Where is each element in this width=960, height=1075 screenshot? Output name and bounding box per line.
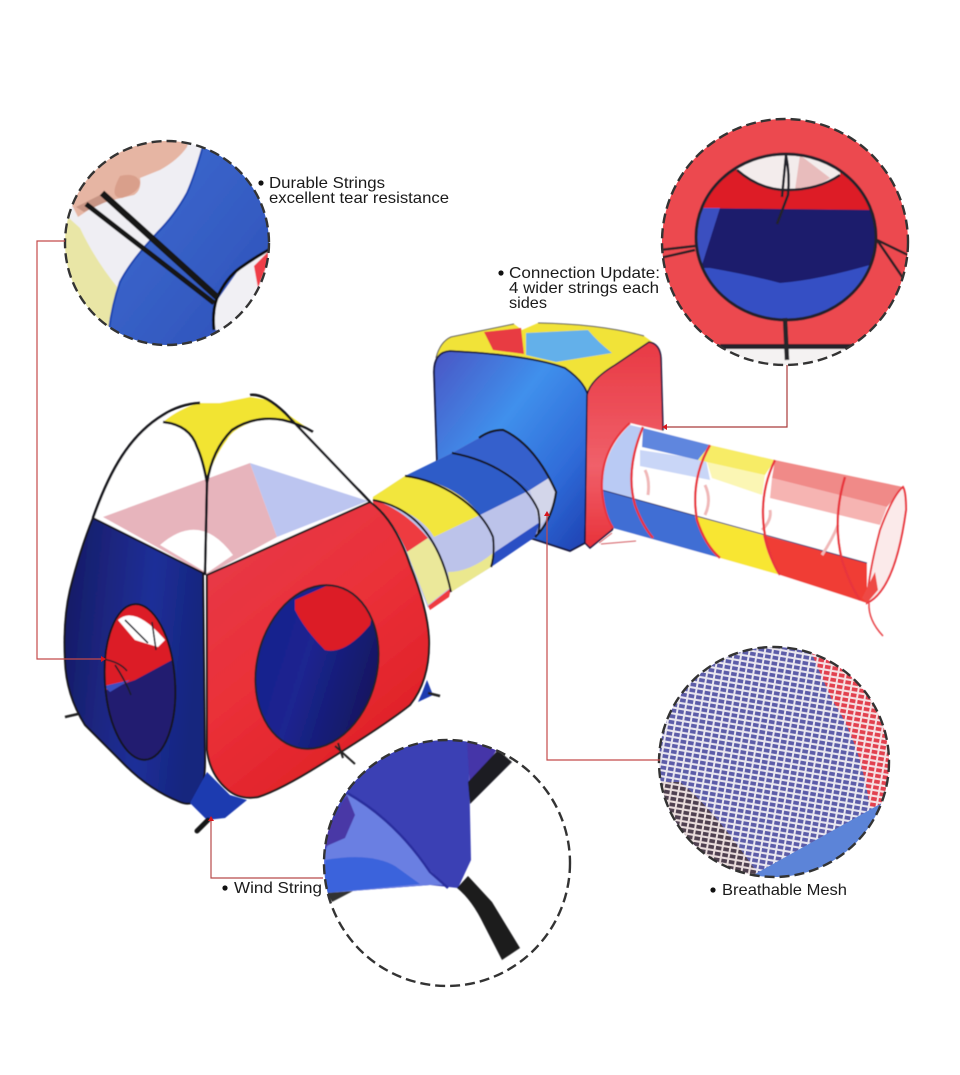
right tunnel bbox=[599, 423, 906, 636]
tent poles and outline bbox=[93, 395, 370, 575]
tent yellow cap bbox=[163, 397, 313, 483]
label: connection update bbox=[498, 265, 660, 312]
callout: wind string circle bbox=[320, 720, 570, 986]
label: connection update: Connection Update: bbox=[509, 265, 660, 282]
leader line: wind string bbox=[211, 820, 323, 878]
cube tent with right tunnel bbox=[434, 323, 906, 636]
tent bottom flap bbox=[190, 772, 247, 820]
callout: mesh circle bbox=[655, 645, 900, 880]
tent red panel bbox=[207, 502, 429, 798]
big pop-up tent bbox=[65, 395, 440, 831]
callout: connection strings circle bbox=[660, 118, 910, 366]
label: connection update: sides bbox=[509, 295, 547, 312]
tunnel blue sections bbox=[405, 430, 556, 567]
tent mesh interior bbox=[93, 396, 370, 575]
tent guy loops bbox=[65, 693, 440, 831]
leader line: connection bbox=[665, 365, 787, 427]
tent side flap bbox=[418, 680, 433, 702]
label: wind string: Wind String bbox=[234, 880, 322, 897]
label: durable strings: excellent tear resistance bbox=[269, 190, 449, 207]
label: durable strings bbox=[258, 175, 449, 207]
tent blue panel bbox=[65, 518, 205, 804]
tunnel lower yellow strip bbox=[448, 553, 493, 592]
callout: durable strings circle bbox=[60, 135, 275, 352]
label: connection update: 4 wider strings each bbox=[509, 280, 659, 297]
tent hole right bbox=[254, 584, 380, 766]
tent hole left bbox=[103, 602, 177, 762]
label: breathable mesh: Breathable Mesh bbox=[722, 882, 847, 899]
tunnel yellow section bbox=[373, 476, 480, 537]
cube tent: top bbox=[436, 323, 655, 395]
leader arrowheads bbox=[101, 424, 667, 821]
leader line: mesh bbox=[547, 514, 660, 760]
leader line: durable strings bbox=[37, 241, 103, 659]
cube tent: blue face bbox=[434, 351, 588, 551]
tunnel mouth by tent bbox=[373, 500, 451, 610]
left tunnel bbox=[373, 430, 556, 610]
cube tent: red side bbox=[585, 342, 663, 548]
label: durable strings: Durable Strings bbox=[269, 175, 385, 192]
